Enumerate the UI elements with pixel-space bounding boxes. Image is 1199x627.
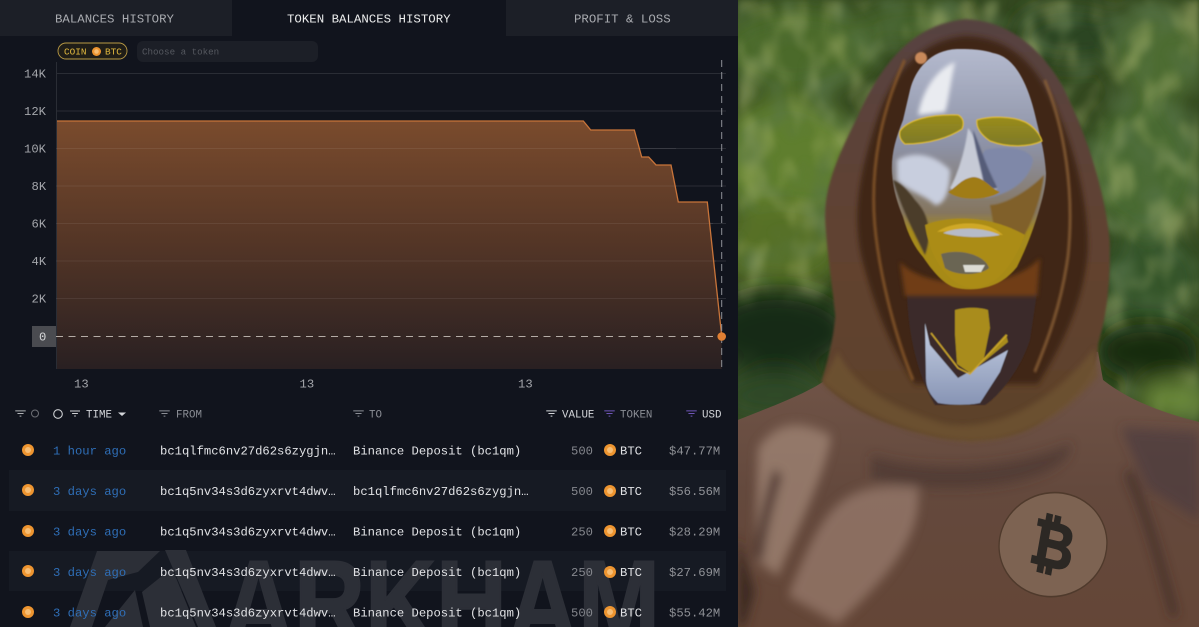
row 3 [22,525,720,540]
table header: TO [369,410,382,422]
row 1: 1 hour ago [53,444,126,458]
row 2: bc1q5nv34s3d6zyxrvt4dwv… [160,485,336,499]
row 4: Binance Deposit (bc1qm) [353,566,521,580]
row 2: $56.56M [669,485,720,499]
row 3: bc1q5nv34s3d6zyxrvt4dwv… [160,526,336,540]
row 3: 3 days ago [53,526,126,540]
row 1 [22,444,720,458]
row 3: $28.29M [669,526,720,540]
row 2: bc1qlfmc6nv27d62s6zygjn… [353,485,529,499]
foliage background [708,0,1199,440]
neck with reflection [907,293,1037,405]
row 4 [22,565,720,580]
row 4: bc1q5nv34s3d6zyxrvt4dwv… [160,566,336,580]
table row stripes [9,470,726,591]
table header [15,410,721,422]
hood [822,19,1110,441]
row 2: 500 [571,485,593,499]
sunglasses [900,115,1042,146]
table header: USD [702,410,721,422]
y axis labels: 2K [32,292,47,306]
table header: VALUE [562,410,594,422]
chest bitcoin medallion: ₿ [1025,503,1081,587]
x axis labels: 13 [74,378,89,392]
row 2: BTC [620,485,642,499]
y axis labels: 12K [24,105,47,119]
row 1: 500 [571,444,593,458]
row 4: BTC [620,566,642,580]
row 5: BTC [620,606,642,620]
y axis labels: 0 [39,330,46,344]
y axis labels: 8K [32,180,47,194]
y axis labels: 14K [24,68,47,82]
row 5 [22,606,720,620]
row 3: BTC [620,526,642,540]
mouth [937,223,1003,235]
metal face [892,49,1046,289]
filter chip: coin BTC [58,43,127,59]
row 5: 500 [571,606,593,620]
row 4: $27.69M [669,566,720,580]
watermark: Arkham logo [70,536,660,627]
row 5: $55.42M [669,606,720,620]
table header: TOKEN [620,410,652,422]
row 5: bc1q5nv34s3d6zyxrvt4dwv… [160,606,336,620]
crosshair [56,60,726,369]
balance line [57,121,722,336]
hoodie body [738,352,1199,627]
nose [950,128,998,196]
row 5: 3 days ago [53,606,126,620]
row 3: 250 [571,526,593,540]
row 2 [22,484,720,499]
x axis labels: 13 [300,378,314,392]
transactions table [15,410,721,620]
x axis labels: 13 [518,378,533,392]
filter chip: coin BTC: BTC [105,46,122,58]
tab: balances history: BALANCES HISTORY [55,12,175,26]
row 1: Binance Deposit (bc1qm) [353,444,521,458]
y axis labels: 6K [32,218,47,232]
row 1: bc1qlfmc6nv27d62s6zygjn… [160,444,336,458]
row 5: Binance Deposit (bc1qm) [353,606,521,620]
chart gridlines [56,62,726,369]
x axis labels [74,378,533,392]
table header: TIME [86,410,112,422]
area chart: token balance [24,60,726,392]
lens flare on hood [915,52,927,64]
token search input [137,41,318,62]
chest bitcoin medallion [996,488,1110,601]
balance area [57,121,722,369]
y axis labels: 10K [24,142,47,156]
row 2: 3 days ago [53,485,126,499]
panel: tab bar [0,0,738,36]
tab: profit and loss: PROFIT & LOSS [574,12,671,26]
filter chip: coin BTC: COIN [64,46,87,58]
row 4: 3 days ago [53,566,126,580]
y axis labels [24,68,56,347]
row 4: 250 [571,566,593,580]
tab: token balances history: TOKEN BALANCES HISTORY [287,12,451,26]
hoodie folds [738,425,1199,627]
panel: statue photo [708,0,1199,627]
table header: FROM [176,410,202,422]
row 3: Binance Deposit (bc1qm) [353,526,521,540]
row 1: BTC [620,444,642,458]
row 1: $47.77M [669,444,720,458]
panel: dashboard background [0,0,738,627]
copper glow beneath chin [900,258,1040,296]
y axis labels: 4K [32,255,47,269]
token search input: Choose a token [142,46,219,58]
